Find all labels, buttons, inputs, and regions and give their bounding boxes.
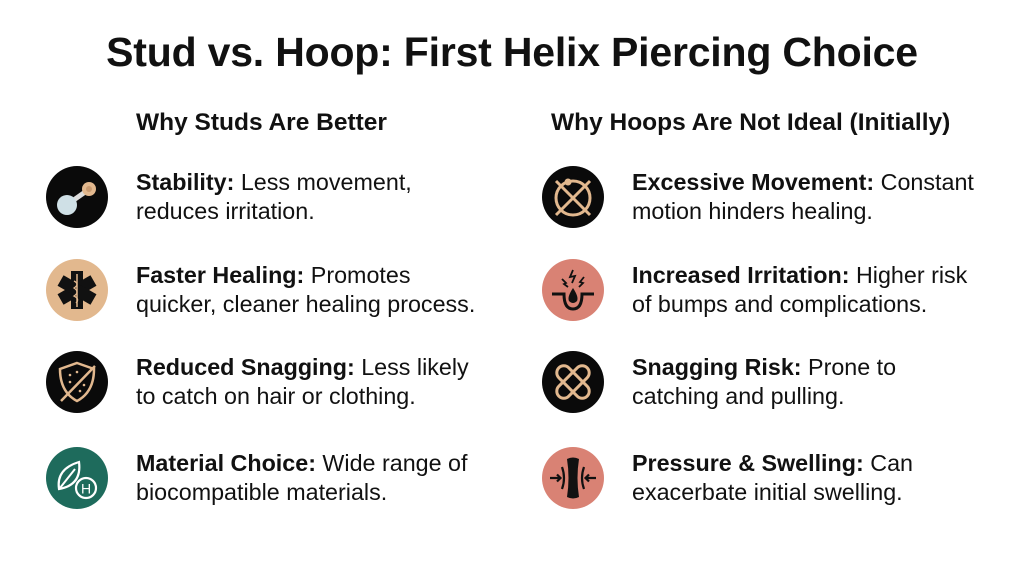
text [136, 262, 475, 317]
text: biocompatible materials. [136, 479, 387, 505]
title: Stud vs. Hoop: First Helix Piercing Choice [106, 29, 918, 75]
item: faster healing [46, 259, 475, 321]
text [136, 169, 412, 224]
text [632, 169, 974, 224]
icon: irritation drop [542, 259, 604, 321]
item: irritation [542, 259, 968, 321]
text [136, 354, 469, 409]
text: to catch on hair or clothing. [136, 383, 416, 409]
text: catching and pulling. [632, 383, 844, 409]
text: Material Choice: Wide range of [136, 450, 467, 476]
heading: hoops: Why Hoops Are Not Ideal (Initially) [551, 109, 950, 136]
heading: studs: Why Studs Are Better [136, 109, 387, 136]
text: Snagging Risk: Prone to [632, 354, 896, 380]
icon: leaf H: H [81, 480, 91, 496]
text: reduces irritation. [136, 198, 315, 224]
text [632, 354, 896, 409]
icon: leaf H [46, 447, 108, 509]
icon: pressure [542, 447, 604, 509]
icon: shield [46, 351, 108, 413]
item: stability [46, 166, 412, 228]
icon: medical star [46, 259, 108, 321]
text: of bumps and complications. [632, 291, 927, 317]
item: pressure [542, 447, 913, 509]
text: exacerbate initial swelling. [632, 479, 903, 505]
text: Stability: Less movement, [136, 169, 412, 195]
text: Reduced Snagging: Less likely [136, 354, 469, 380]
text: motion hinders healing. [632, 198, 873, 224]
text: Pressure & Swelling: Can [632, 450, 913, 476]
text: Faster Healing: Promotes [136, 262, 410, 288]
icon: tangled links [542, 351, 604, 413]
text: quicker, cleaner healing process. [136, 291, 475, 317]
item: material [46, 447, 468, 509]
icon: crossed hoop [542, 166, 604, 228]
item: snagging risk [542, 351, 896, 413]
item: snagging [46, 351, 469, 413]
icon: stud [46, 166, 108, 228]
item: excessive movement [542, 166, 974, 228]
text [632, 262, 968, 317]
text: Excessive Movement: Constant [632, 169, 974, 195]
text [632, 450, 913, 505]
text [136, 450, 468, 505]
text: Increased Irritation: Higher risk [632, 262, 967, 288]
